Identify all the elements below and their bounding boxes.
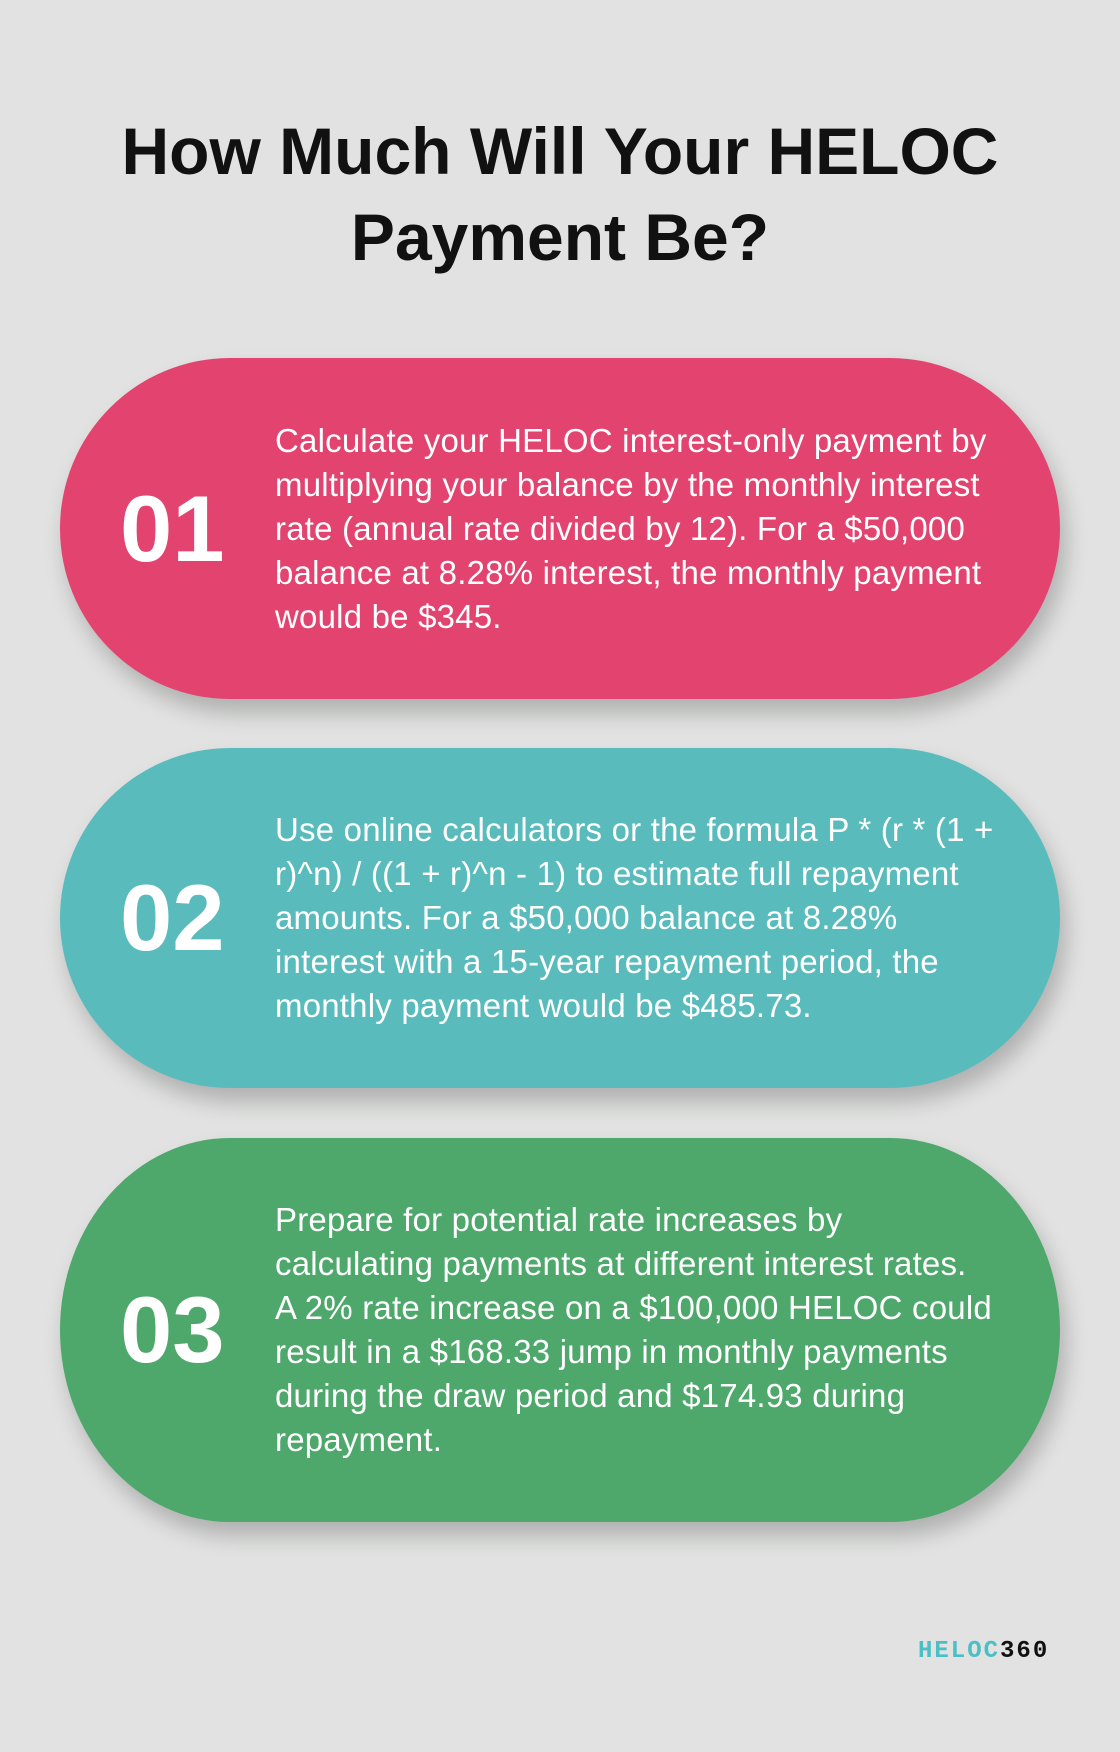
text 03 — [275, 1201, 992, 1458]
text 01: balance at 8.28% interest, the monthly payment — [275, 554, 981, 590]
text 01: would be $345. — [275, 598, 502, 634]
number 02: 02 — [120, 865, 225, 970]
text 02: Use online calculators or the formula P * (r * (1 + — [275, 811, 994, 848]
text 01 — [275, 422, 986, 634]
text 03: result in a $168.33 jump in monthly payments — [275, 1333, 948, 1370]
text 02 — [275, 811, 994, 1024]
text 01: Calculate your HELOC interest-only payment by — [275, 422, 986, 458]
text 03: A 2% rate increase on a $100,000 HELOC could — [275, 1289, 992, 1326]
logo: HELOC360 — [918, 1638, 1049, 1665]
title: How Much Will Your HELOC — [122, 114, 998, 188]
number 03: 03 — [120, 1277, 225, 1382]
text 03: during the draw period and $174.93 during — [275, 1377, 905, 1414]
panel: step 01 — [60, 358, 1060, 699]
text 03: repayment. — [275, 1421, 442, 1458]
text 02: monthly payment would be $485.73. — [275, 987, 812, 1024]
panel: step 02 — [60, 748, 1060, 1088]
text 01: rate (annual rate divided by 12). For a $50,000 — [275, 510, 965, 546]
title: Payment Be? — [351, 200, 769, 274]
title — [122, 114, 998, 274]
text 03: calculating payments at different interest rates. — [275, 1245, 967, 1282]
text 03: Prepare for potential rate increases by — [275, 1201, 842, 1238]
panel: step 03 — [60, 1138, 1060, 1522]
text 02: interest with a 15-year repayment period, the — [275, 943, 939, 980]
number 01: 01 — [120, 476, 225, 580]
text 02: amounts. For a $50,000 balance at 8.28% — [275, 899, 897, 936]
text 01: multiplying your balance by the monthly interest — [275, 466, 980, 502]
text 02: r)^n) / ((1 + r)^n - 1) to estimate full repayment — [275, 855, 959, 892]
